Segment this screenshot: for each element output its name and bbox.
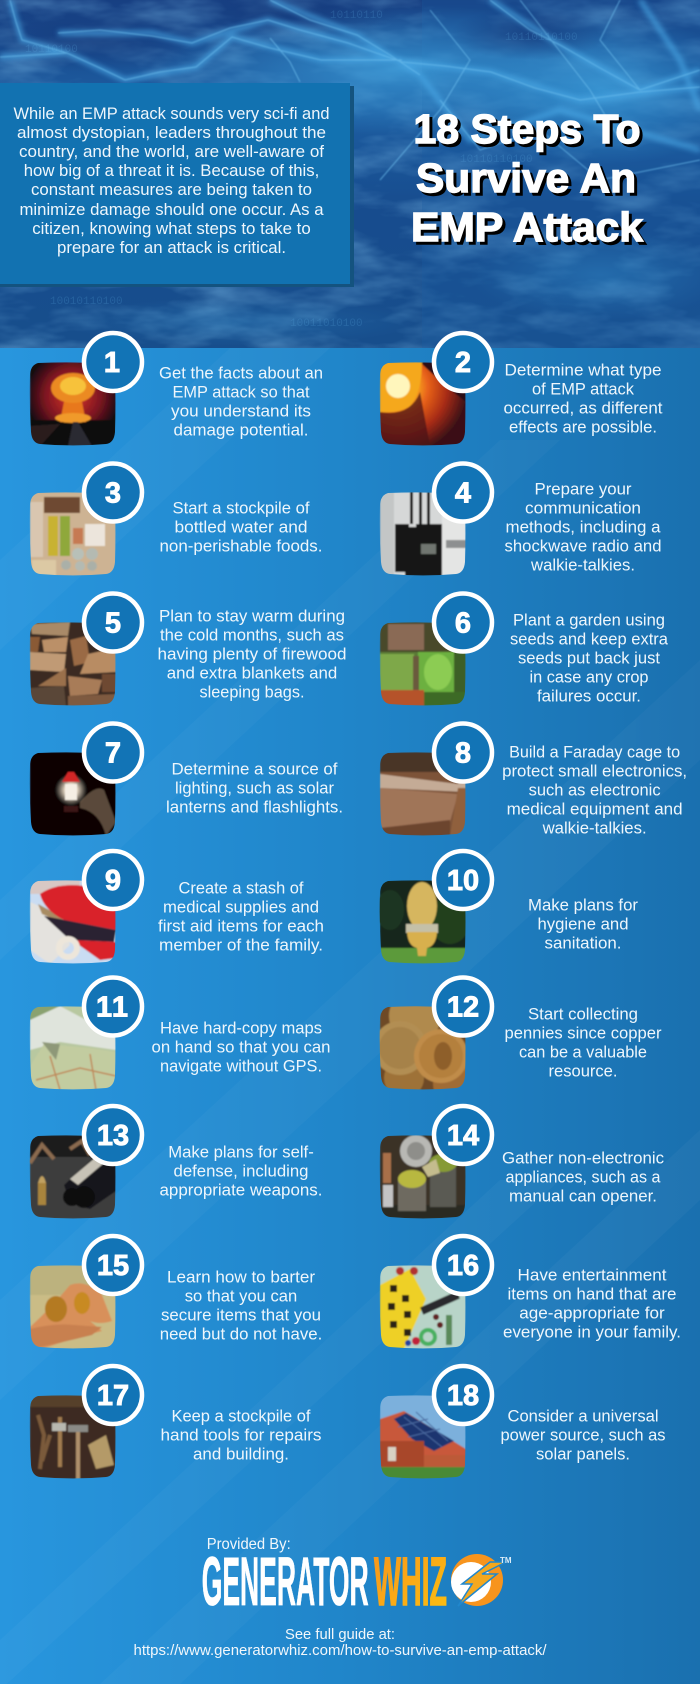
step text 3: non-perishable foods. xyxy=(160,536,322,555)
step text 7: lanterns and flashlights. xyxy=(166,798,343,817)
step text 6 xyxy=(510,611,669,706)
step text 14: Gather non-electronic xyxy=(502,1149,664,1168)
step text 10 xyxy=(528,896,638,953)
panel: intro text: citizen, knowing what steps to take to xyxy=(32,219,311,238)
logo: GeneratorWhiz: TM xyxy=(500,1556,512,1565)
photo: solar panel roof xyxy=(380,1395,466,1479)
step text 11: on hand so that you can xyxy=(152,1038,330,1057)
step 13 xyxy=(30,1106,322,1219)
footer source link: https://www.generatorwhiz.com/how-to-survive-an-emp-attack/ xyxy=(134,1642,547,1659)
photo: hands with gold xyxy=(30,1265,116,1349)
step text 2: Determine what type xyxy=(504,360,662,379)
step text 12 xyxy=(504,1005,662,1081)
photo: mushroom cloud xyxy=(30,362,116,446)
step text 9: member of the family. xyxy=(159,936,323,955)
number badge 3 xyxy=(84,464,142,522)
step text 5: sleeping bags. xyxy=(200,683,304,702)
title: Survive An xyxy=(419,158,639,204)
number badge 4: 4 xyxy=(455,478,471,510)
step text 7: lighting, such as solar xyxy=(175,779,334,798)
step text 18: power source, such as xyxy=(500,1426,666,1445)
number badge 7 xyxy=(84,724,142,782)
photo: food stockpile xyxy=(30,492,116,576)
step text 1 xyxy=(159,363,323,439)
number badge 5: 5 xyxy=(105,608,121,640)
step text 1: you understand its xyxy=(171,401,311,420)
number badge 10: 10 xyxy=(447,865,479,897)
photo: toilet outdoors xyxy=(376,880,470,964)
step text 8 xyxy=(502,743,687,838)
number badge 3: 3 xyxy=(105,478,121,510)
step text 15: Learn how to barter xyxy=(167,1268,315,1287)
step text 17: hand tools for repairs xyxy=(160,1426,322,1445)
step text 18: solar panels. xyxy=(536,1445,630,1464)
number badge 16 xyxy=(434,1236,492,1294)
step text 8: such as electronic xyxy=(529,781,661,800)
number badge 2: 2 xyxy=(455,347,471,379)
number badge 8: 8 xyxy=(455,738,471,770)
step text 1: EMP attack so that xyxy=(172,382,310,401)
step 6 xyxy=(380,594,669,706)
number badge 18: 18 xyxy=(447,1380,479,1412)
step text 3: Start a stockpile of xyxy=(172,498,310,517)
step text 10: hygiene and xyxy=(538,915,628,934)
step text 18 xyxy=(500,1407,666,1464)
photo: solar fireball xyxy=(380,362,466,446)
header: lightning banner: 10011010100 xyxy=(290,318,363,330)
step 18 xyxy=(380,1366,666,1479)
step 17 xyxy=(30,1366,322,1479)
step text 2: of EMP attack xyxy=(532,379,634,398)
number badge 14: 14 xyxy=(447,1120,479,1152)
title: EMP Attack xyxy=(411,204,643,250)
step 12 xyxy=(380,975,662,1090)
step text 1: damage potential. xyxy=(174,420,308,439)
step text 14 xyxy=(502,1149,664,1206)
step text 9: medical supplies and xyxy=(163,898,319,917)
step text 3: bottled water and xyxy=(174,517,308,536)
panel: intro text: prepare for an attack is critical. xyxy=(57,238,286,257)
number badge 13 xyxy=(84,1106,142,1164)
panel: intro text: constant measures are being taken to xyxy=(31,180,312,199)
step text 4: walkie-talkies. xyxy=(530,556,635,575)
header: lightning banner: 10110100 xyxy=(25,44,78,56)
panel: intro text: While an EMP attack sounds very sci-fi and xyxy=(14,104,330,123)
step text 18: Consider a universal xyxy=(508,1407,658,1426)
step text 16: Have entertainment xyxy=(518,1266,667,1285)
step text 10: sanitation. xyxy=(544,934,622,953)
photo: paper maps xyxy=(30,1006,116,1090)
step text 8: walkie-talkies. xyxy=(542,819,647,838)
step text 9 xyxy=(158,879,324,955)
photo: walkie-talkies xyxy=(380,492,466,576)
number badge 4 xyxy=(434,464,492,522)
step 1 xyxy=(30,333,323,446)
footer source link xyxy=(134,1626,547,1659)
step text 5: the cold months, such as xyxy=(160,626,344,645)
step text 5: Plan to stay warm during xyxy=(159,607,345,626)
step text 15: secure items that you xyxy=(161,1306,321,1325)
photo: pistol and bullet xyxy=(30,1135,116,1219)
step text 6: seeds and keep extra xyxy=(510,630,669,649)
photo: garden xyxy=(380,622,466,706)
footer source link: See full guide at: xyxy=(285,1626,395,1643)
step text 6: Plant a garden using xyxy=(513,611,665,630)
step text 16 xyxy=(503,1266,681,1342)
step 10 xyxy=(376,851,638,964)
step text 4: shockwave radio and xyxy=(504,537,662,556)
step text 12: resource. xyxy=(548,1062,618,1081)
step text 2: effects are possible. xyxy=(509,417,657,436)
step 2 xyxy=(380,333,663,446)
number badge 12 xyxy=(434,978,492,1036)
step text 5 xyxy=(158,607,346,702)
step text 6: failures occur. xyxy=(537,687,641,706)
step text 1: Get the facts about an xyxy=(159,363,323,382)
header: lightning banner: 10010110100 xyxy=(50,296,123,308)
step text 15 xyxy=(160,1268,322,1344)
step text 17: Keep a stockpile of xyxy=(172,1407,311,1426)
title: EMP Attack xyxy=(414,207,646,253)
step text 11: Have hard-copy maps xyxy=(160,1019,322,1038)
number badge 9 xyxy=(84,851,142,909)
step text 4: communication xyxy=(525,499,641,518)
step 3 xyxy=(30,464,322,576)
number badge 17 xyxy=(84,1366,142,1424)
step text 4 xyxy=(504,480,662,575)
icon: lightning bolt circle xyxy=(451,1554,506,1606)
step text 8: medical equipment and xyxy=(507,800,683,819)
title: 18 Steps To xyxy=(416,109,644,155)
step text 13: Make plans for self- xyxy=(168,1143,314,1162)
step text 9: Create a stash of xyxy=(178,879,304,898)
number badge 13: 13 xyxy=(97,1120,129,1152)
step 5 xyxy=(30,594,346,706)
number badge 9: 9 xyxy=(105,865,121,897)
step text 14: manual can opener. xyxy=(509,1187,657,1206)
step 8 xyxy=(380,724,687,838)
step text 16: everyone in your family. xyxy=(503,1323,681,1342)
panel: intro text: how big of a threat it is. Because of this, xyxy=(24,161,319,180)
step text 6: in case any crop xyxy=(530,668,648,687)
number badge 1 xyxy=(84,333,142,391)
number badge 1: 1 xyxy=(104,347,120,379)
panel: intro text: minimize damage should one occur. As a xyxy=(20,200,324,219)
step text 13 xyxy=(160,1143,322,1200)
header: lightning banner: 10110110100 xyxy=(460,154,533,166)
diagonal background streaks xyxy=(0,348,700,1684)
panel: intro text xyxy=(0,83,354,287)
panel: intro text: country, and the world, are well-aware of xyxy=(19,142,324,161)
number badge 5 xyxy=(84,594,142,652)
step text 2: occurred, as different xyxy=(504,398,663,417)
photo: Faraday cage box xyxy=(380,752,466,836)
number badge 10 xyxy=(434,851,492,909)
number badge 16: 16 xyxy=(447,1250,479,1282)
title xyxy=(411,106,646,253)
number badge 8 xyxy=(434,724,492,782)
step text 4: methods, including a xyxy=(506,518,661,537)
step text 17 xyxy=(160,1407,322,1464)
step text 13: defense, including xyxy=(174,1162,308,1181)
photo: first aid kit xyxy=(30,880,116,964)
photo: lantern xyxy=(30,752,116,836)
step text 11 xyxy=(152,1019,330,1076)
number badge 17: 17 xyxy=(97,1380,129,1412)
number badge 11 xyxy=(84,978,142,1036)
number badge 6 xyxy=(434,594,492,652)
step text 10: Make plans for xyxy=(528,896,638,915)
step text 2 xyxy=(504,360,663,436)
number badge 18 xyxy=(434,1366,492,1424)
step text 13: appropriate weapons. xyxy=(160,1181,322,1200)
photo: firewood xyxy=(30,622,116,706)
step 9 xyxy=(30,851,324,964)
step 11 xyxy=(30,978,330,1090)
number badge 14 xyxy=(434,1106,492,1164)
step text 15: need but do not have. xyxy=(160,1325,322,1344)
step text 14: appliances, such as a xyxy=(506,1168,661,1187)
step 16 xyxy=(380,1236,681,1349)
step text 5: having plenty of firewood xyxy=(158,645,346,664)
step text 3 xyxy=(160,498,322,555)
logo: GeneratorWhiz: WHIZ xyxy=(374,1543,447,1620)
photo: copper pennies xyxy=(380,1006,466,1090)
step text 7 xyxy=(166,760,343,817)
number badge 12: 12 xyxy=(447,992,479,1024)
step text 4: Prepare your xyxy=(534,480,632,499)
logo: GeneratorWhiz: GENERATOR xyxy=(202,1543,369,1620)
number badge 2 xyxy=(434,333,492,391)
step text 8: Build a Faraday cage to xyxy=(509,743,680,762)
step text 16: items on hand that are xyxy=(508,1285,676,1304)
header: lightning banner xyxy=(0,0,700,348)
step text 15: so that you can xyxy=(185,1287,297,1306)
number badge 6: 6 xyxy=(455,608,471,640)
step text 9: first aid items for each xyxy=(158,917,324,936)
step text 11: navigate without GPS. xyxy=(160,1057,322,1076)
header: lightning banner: 10110110 xyxy=(330,10,383,22)
step 4 xyxy=(380,464,662,576)
number badge 7: 7 xyxy=(105,738,121,770)
step text 16: age-appropriate for xyxy=(519,1304,665,1323)
step text 8: protect small electronics, xyxy=(502,762,687,781)
title: Survive An xyxy=(416,155,636,201)
header: lightning banner: 10110110100 xyxy=(505,32,578,44)
step 7 xyxy=(30,724,343,836)
number badge 11: 11 xyxy=(96,992,128,1024)
photo: board games xyxy=(380,1265,466,1349)
photo: cans and manual opener xyxy=(380,1135,466,1219)
number badge 15 xyxy=(84,1236,142,1294)
step text 6: seeds put back just xyxy=(518,649,660,668)
title: 18 Steps To xyxy=(414,106,640,152)
step text 12: can be a valuable xyxy=(519,1043,647,1062)
step text 5: and extra blankets and xyxy=(167,664,337,683)
panel: intro text: almost dystopian, leaders throughout the xyxy=(17,123,326,142)
step text 12: Start collecting xyxy=(528,1005,638,1024)
step 14 xyxy=(380,1106,664,1219)
number badge 15: 15 xyxy=(97,1250,129,1282)
provided by label: Provided By: xyxy=(207,1536,291,1553)
photo: hand tools xyxy=(30,1395,116,1479)
step text 12: pennies since copper xyxy=(504,1024,662,1043)
step text 17: and building. xyxy=(193,1445,289,1464)
step text 7: Determine a source of xyxy=(172,760,338,779)
step 15 xyxy=(30,1236,322,1349)
